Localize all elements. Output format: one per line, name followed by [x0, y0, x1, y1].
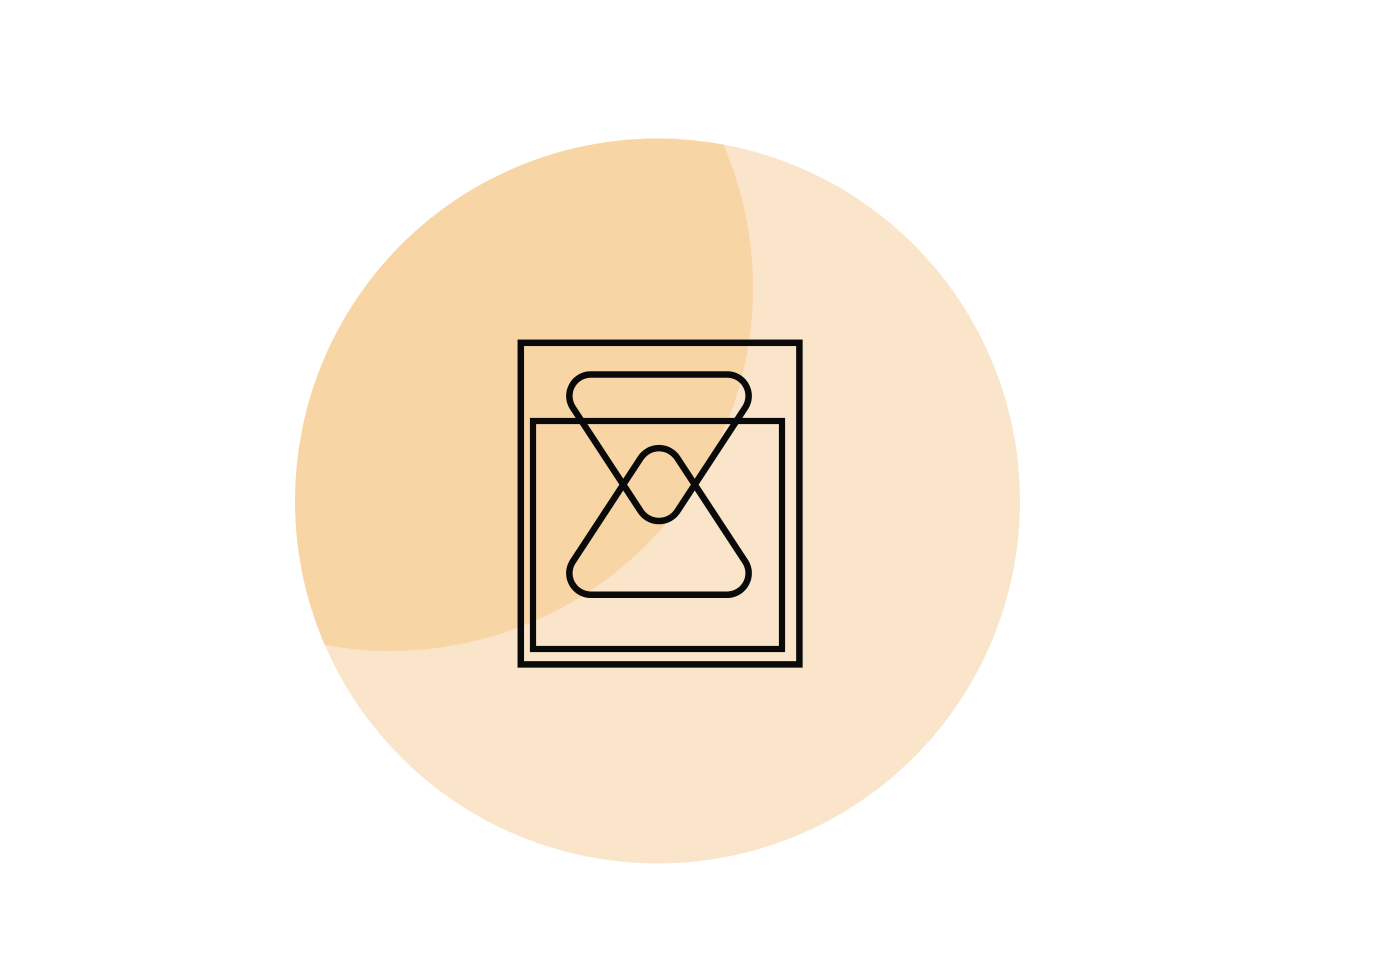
downward rounded triangle [569, 374, 749, 521]
outer square [521, 343, 799, 664]
inner square [533, 421, 782, 649]
upward rounded triangle [569, 448, 749, 595]
icon: nested squares with overlapping rounded triangles [521, 343, 799, 664]
illustration: circular badge with geometric icon [295, 138, 1020, 864]
background circle [295, 138, 1020, 864]
darker overlapping circle segment [295, 138, 753, 651]
